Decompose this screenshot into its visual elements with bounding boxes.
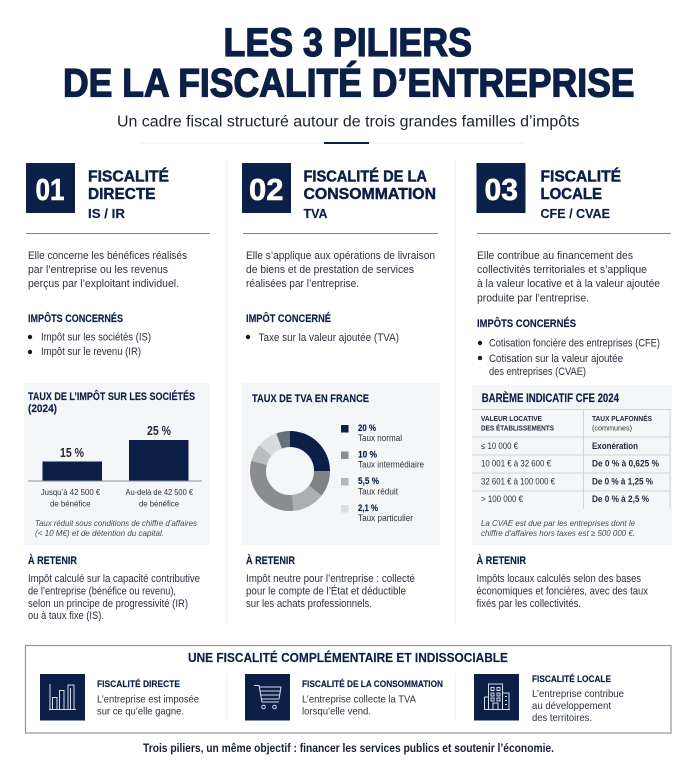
description: perçus par l’exploitant individuel. (28, 278, 179, 290)
bar chart: taux de l'impôt sur les sociétés: Au-delà de 42 500 € (126, 487, 193, 497)
legend: Taux réduit (358, 486, 398, 498)
heading: fiscalité de la consommation: CONSOMMATION (304, 186, 436, 203)
number badge 03 (476, 163, 526, 213)
summary: fiscalité locale: L’entreprise contribue (532, 688, 624, 700)
icon: bar chart (40, 674, 85, 720)
table: barème indicatif CFE 2024: La CVAE est due par les entreprises dont le (481, 518, 635, 528)
description: collectivités territoriales et s’applique (477, 264, 647, 276)
impôt concerné (246, 312, 399, 344)
summary: fiscalité directe: L’entreprise est imposée (97, 694, 199, 706)
description: réalisées par l’entreprise. (246, 278, 359, 290)
title (63, 21, 634, 106)
description: Elle contribue au financement des (477, 250, 633, 262)
heading: fiscalité locale: LOCALE (540, 186, 602, 203)
heading: fiscalité directe (88, 168, 169, 221)
table: barème indicatif CFE 2024: De 0 % à 1,25 % (592, 476, 653, 486)
subtitle: Un cadre fiscal structuré autour de trois grandes familles d’impôts (117, 114, 580, 130)
à retenir: de l’entreprise (bénéfice ou revenu), (28, 586, 176, 598)
donut chart: taux de TVA en France (242, 383, 440, 545)
table: barème indicatif CFE 2024: De 0 % à 2,5 % (592, 494, 649, 504)
number badge 01 (26, 163, 75, 213)
impôts concernés (28, 312, 151, 358)
summary: fiscalité de la consommation (302, 679, 443, 718)
description (477, 250, 660, 304)
bar chart: taux de l'impôt sur les sociétés: Jusqu’à 42 500 € (41, 487, 100, 497)
legend (341, 423, 424, 524)
à retenir: Impôt calculé sur la capacité contributive (28, 573, 200, 585)
table: barème indicatif CFE 2024: De 0 % à 0,625 % (592, 458, 659, 468)
heading: fiscalité directe: FISCALITÉ (88, 168, 169, 186)
impôts concernés: Cotisation foncière des entreprises (CFE) (489, 338, 660, 350)
à retenir (246, 554, 415, 610)
summary: fiscalité de la consommation: FISCALITÉ DE LA CONSOMMATION (302, 679, 443, 690)
à retenir: À RETENIR (246, 554, 295, 567)
bar chart: taux de l'impôt sur les sociétés: Taux réduit sous conditions de chiffre d’affaires (35, 518, 198, 528)
summary: fiscalité directe: FISCALITÉ DIRECTE (97, 679, 180, 690)
heading: fiscalité locale: CFE / CVAE (540, 207, 610, 221)
bar chart: taux de l'impôt sur les sociétés: de bénéfice (50, 498, 91, 508)
panel: fiscalité locale (472, 163, 672, 610)
number badge 02 (242, 163, 291, 213)
bar chart: taux de l'impôt sur les sociétés: (< 10 M€) et de détention du capital. (35, 528, 164, 538)
table: barème indicatif CFE 2024: chiffre d’affaires hors taxes est ≥ 500 000 €. (481, 528, 635, 538)
impôts concernés: IMPÔTS CONCERNÉS (477, 317, 576, 330)
number badge 01: 01 (36, 172, 64, 207)
number badge 02: 02 (249, 172, 284, 207)
à retenir (476, 554, 648, 610)
summary: fiscalité locale (532, 674, 624, 724)
summary: fiscalité de la consommation: lorsqu’elle vend. (302, 706, 371, 718)
heading: fiscalité de la consommation: TVA (304, 207, 328, 221)
summary: fiscalité locale: au développement (532, 700, 611, 712)
à retenir: À RETENIR (28, 554, 77, 567)
impôt concerné: Taxe sur la valeur ajoutée (TVA) (258, 332, 399, 344)
panel heading: UNE FISCALITÉ COMPLÉMENTAIRE ET INDISSOCIABLE (188, 650, 508, 665)
summary: fiscalité directe: sur ce qu’elle gagne. (97, 706, 184, 718)
description (246, 250, 435, 290)
legend: Taux intermédiaire (358, 460, 424, 470)
legend: 2,1 % (358, 503, 378, 514)
heading: fiscalité locale (540, 168, 621, 221)
table: barème indicatif CFE 2024: (communes) (592, 424, 632, 432)
legend: Taux particulier (358, 513, 413, 524)
impôts concernés: Impôt sur le revenu (IR) (41, 346, 141, 358)
table: barème indicatif CFE 2024: BARÈME INDICATIF CFE 2024 (482, 392, 619, 405)
summary: fiscalité directe (97, 679, 199, 718)
à retenir (28, 554, 200, 622)
description: Elle concerne les bénéfices réalisés (28, 250, 187, 262)
description: à la valeur locative et à la valeur ajoutée (477, 278, 660, 290)
impôts concernés (477, 317, 660, 378)
impôts concernés: des entreprises (CVAE) (489, 366, 586, 378)
à retenir: économiques et foncières, avec des taux (476, 586, 648, 598)
legend: 20 % (358, 423, 376, 434)
bar chart: taux de l'impôt sur les sociétés: TAUX DE L’IMPÔT SUR LES SOCIÉTÉS (28, 390, 195, 403)
impôt concerné: IMPÔT CONCERNÉ (246, 312, 331, 325)
description: produite par l’entreprise. (477, 292, 589, 304)
à retenir: pour le compte de l’État et déductible (246, 584, 406, 598)
impôts concernés: Cotisation sur la valeur ajoutée (489, 353, 623, 365)
panel: une fiscalité complémentaire et indissociable (26, 646, 671, 733)
table: barème indicatif CFE 2024: ≤ 10 000 € (481, 441, 518, 451)
table: barème indicatif CFE 2024: DES ÉTABLISSEMENTS (481, 424, 554, 432)
bar chart: taux de l'impôt sur les sociétés: 15 % (60, 446, 84, 460)
legend: 5,5 % (358, 476, 379, 487)
à retenir: Impôts locaux calculés selon des bases (476, 573, 641, 585)
impôts concernés: IMPÔTS CONCERNÉS (28, 312, 123, 325)
à retenir: selon un principe de progressivité (IR) (28, 598, 188, 610)
footer statement: Trois piliers, un même objectif : financer les services publics et soutenir l’économie. (143, 743, 554, 755)
icon: shopping cart (245, 674, 290, 720)
table: barème indicatif CFE 2024: 32 601 € à 100 000 € (481, 476, 555, 486)
title: LES 3 PILIERS (224, 21, 472, 65)
à retenir: ou à taux fixe (IS). (28, 610, 104, 622)
impôts concernés: Impôt sur les sociétés (IS) (41, 332, 151, 344)
à retenir: fixés par les collectivités. (476, 598, 581, 610)
title: DE LA FISCALITÉ D’ENTREPRISE (63, 60, 634, 106)
description: par l’entreprise ou les revenus (28, 264, 168, 276)
bar chart: taux de l'impôt sur les sociétés: (2024) (28, 403, 57, 415)
table: barème indicatif CFE 2024: 10 001 € à 32 600 € (481, 458, 551, 468)
à retenir: sur les achats professionnels. (246, 598, 372, 610)
table: barème indicatif CFE 2024: VALEUR LOCATIVE (481, 414, 542, 423)
number badge 03: 03 (484, 172, 518, 207)
heading: fiscalité directe: IS / IR (88, 207, 125, 221)
panel: fiscalité directe (24, 163, 210, 622)
table: barème indicatif CFE 2024: TAUX PLAFONNÉS (592, 414, 652, 423)
heading: fiscalité locale: FISCALITÉ (540, 168, 621, 186)
summary: fiscalité locale: des territoires. (532, 712, 592, 724)
heading: fiscalité de la consommation (304, 168, 436, 221)
legend: 10 % (358, 450, 377, 460)
summary: fiscalité locale: FISCALITÉ LOCALE (532, 674, 611, 685)
à retenir: À RETENIR (476, 554, 526, 567)
description: Elle s’applique aux opérations de livraison (246, 250, 435, 262)
table: barème indicatif CFE 2024 (472, 385, 672, 545)
summary: fiscalité de la consommation: L’entreprise collecte la TVA (302, 694, 416, 706)
donut chart: taux de TVA en France: TAUX DE TVA EN FRANCE (252, 393, 369, 405)
bar chart: taux de l'impôt sur les sociétés: 25 % (147, 424, 171, 438)
icon: office buildings (474, 674, 519, 720)
description: de biens et de prestation de services (246, 264, 414, 276)
heading: fiscalité directe: DIRECTE (88, 186, 156, 203)
à retenir: Impôt neutre pour l’entreprise : collecté (246, 573, 415, 585)
legend: Taux normal (358, 433, 402, 444)
table: barème indicatif CFE 2024: Exonération (592, 441, 638, 451)
bar chart: taux de l'impôt sur les sociétés (24, 383, 210, 545)
table: barème indicatif CFE 2024: > 100 000 € (481, 494, 523, 504)
description (28, 250, 187, 290)
panel: fiscalité de la consommation (242, 163, 440, 610)
heading: fiscalité de la consommation: FISCALITÉ DE LA (304, 168, 427, 186)
bar chart: taux de l'impôt sur les sociétés: de bénéfice (139, 498, 179, 508)
